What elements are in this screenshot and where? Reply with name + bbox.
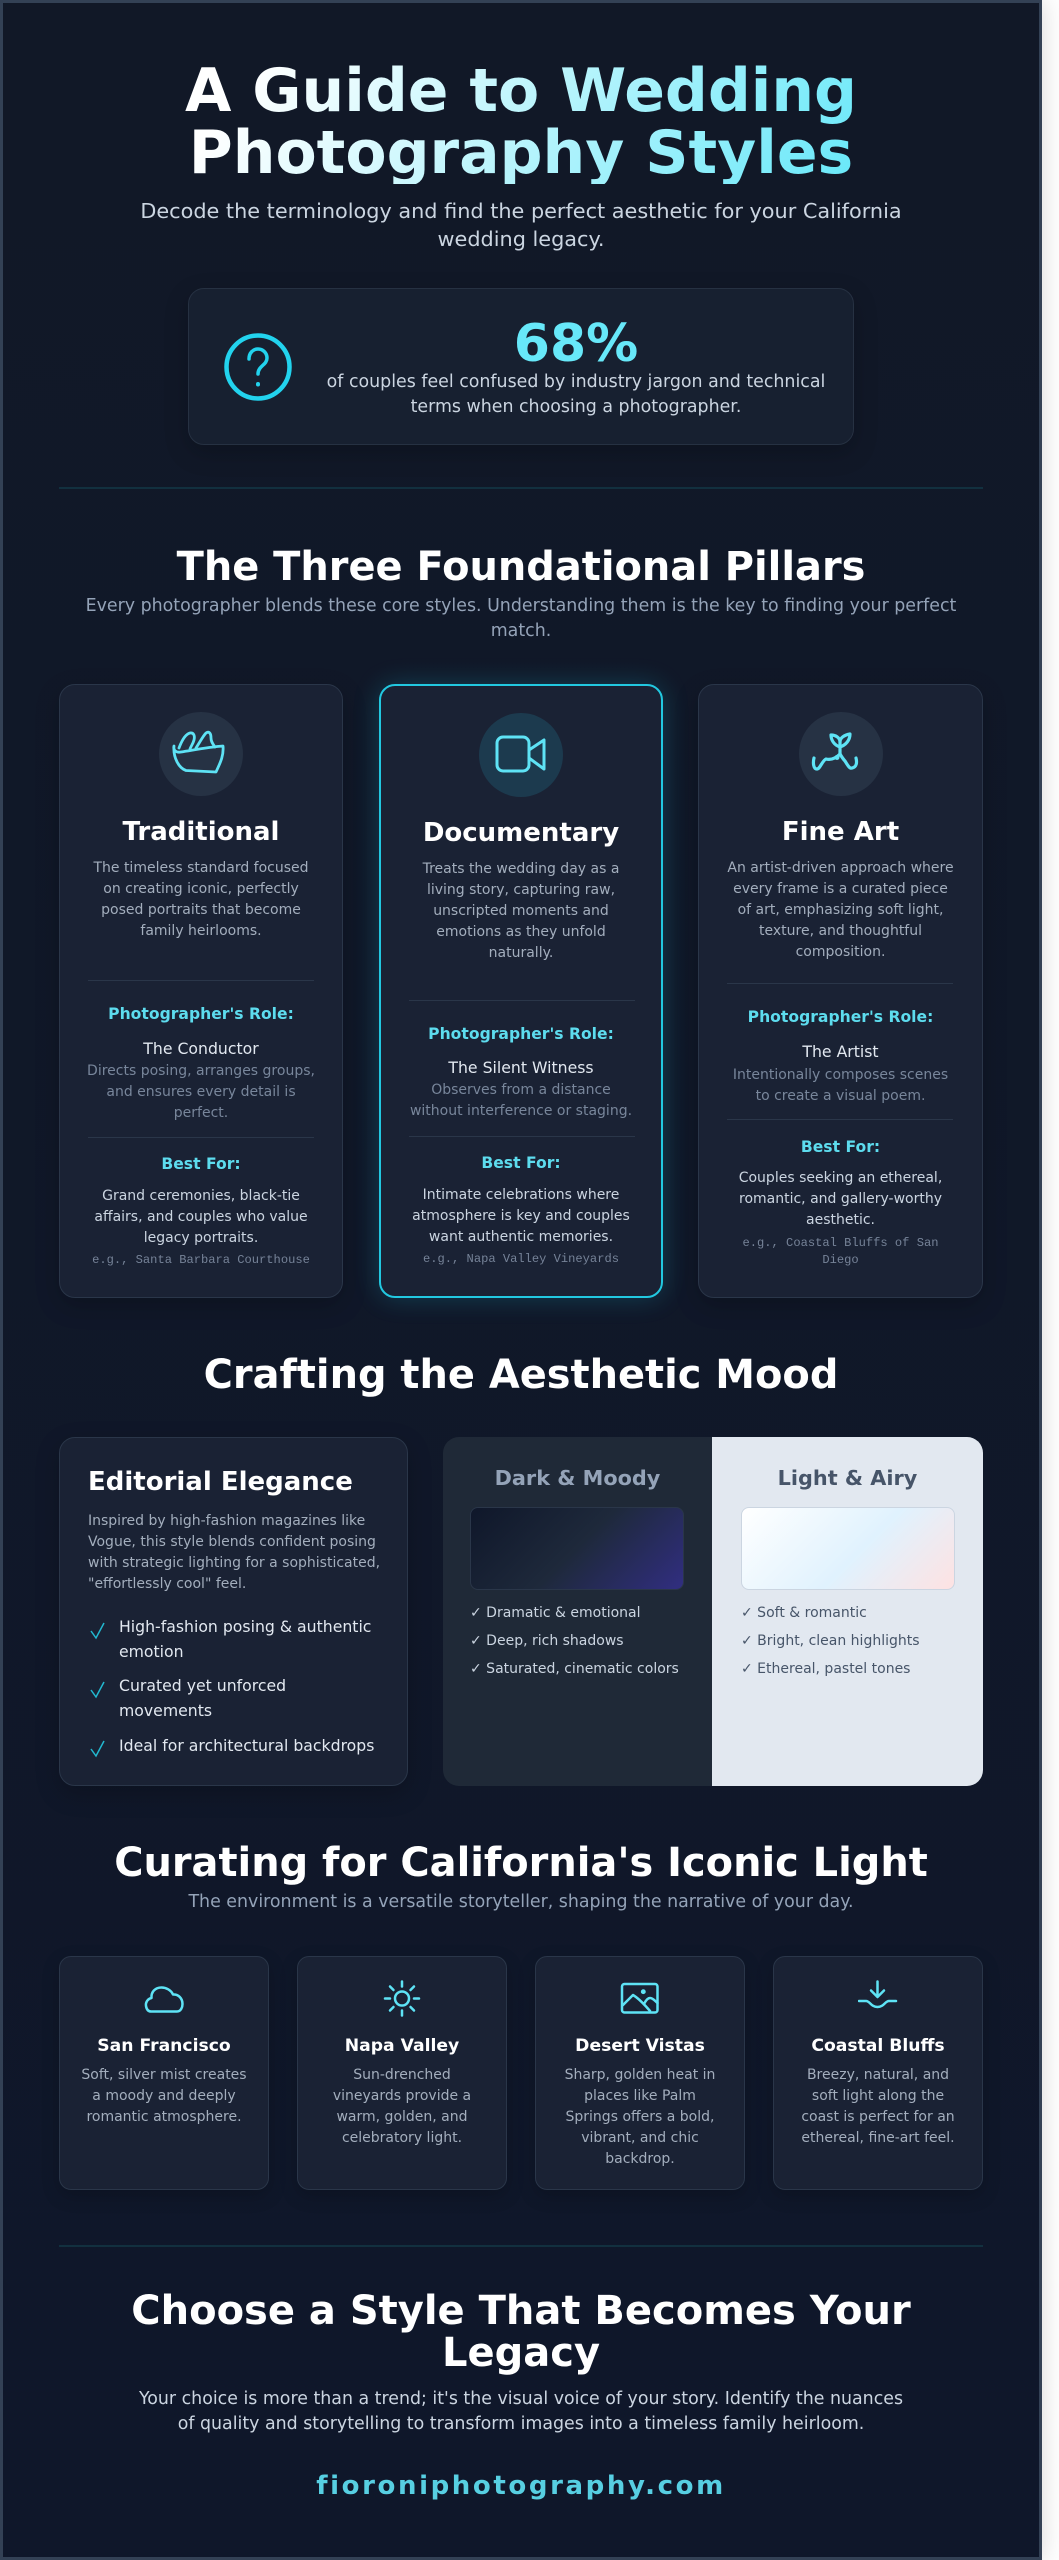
city description: a moody and deeply [92, 2088, 236, 2104]
best for text: want authentic memories. [429, 1228, 613, 1244]
closing text: Your choice is more than a trend; it's the visual voice of your story. Identify the nuances [139, 2389, 903, 2409]
description: naturally. [489, 944, 553, 960]
trait list: ✓ Bright, clean highlights [741, 1633, 920, 1649]
description: living story, capturing raw, [427, 882, 615, 898]
example: Diego [822, 1252, 859, 1266]
heading: closing: Choose a Style That Becomes Your [131, 2288, 911, 2334]
role label: Photographer's Role: [748, 1008, 933, 1026]
statistic description [327, 372, 825, 416]
trait list: ✓ Deep, rich shadows [470, 1633, 624, 1649]
best for text: affairs, and couples who value [94, 1208, 308, 1224]
name: Documentary [423, 818, 619, 848]
city description: celebratory light. [342, 2130, 462, 2146]
title: Photography Styles [189, 118, 853, 188]
feature text: movements [119, 1700, 212, 1720]
role description: Intentionally composes scenes [733, 1066, 948, 1082]
best for text: romantic, and gallery-worthy [739, 1190, 942, 1206]
best for text [739, 1170, 942, 1228]
panel description: with strategic lighting for a sophisticated, [88, 1555, 380, 1571]
feature text: emotion [119, 1642, 184, 1660]
panel: documentary [379, 684, 663, 1298]
trait list [470, 1605, 679, 1677]
city description: Sun-drenched [353, 2067, 451, 2083]
panel: desert vistas [535, 1956, 745, 2190]
statistic number: 68% [514, 314, 638, 374]
name: Fine Art [782, 817, 899, 847]
statistic description: of couples feel confused by industry jargon and technical [327, 372, 825, 392]
city name: San Francisco [97, 2036, 231, 2056]
panel: editorial elegance [59, 1437, 408, 1786]
description [422, 860, 619, 960]
role description: to create a visual poem. [756, 1088, 925, 1104]
best for text [94, 1188, 308, 1246]
role description: Observes from a distance [431, 1082, 611, 1098]
example: e.g., Napa Valley Vineyards [423, 1252, 619, 1266]
city description: soft light along the [812, 2088, 944, 2104]
icon: traditional bowl [159, 712, 243, 796]
description: of art, emphasizing soft light, [738, 902, 943, 918]
description: Treats the wedding day as a [423, 860, 619, 876]
panel: napa valley [297, 1956, 507, 2190]
city description: Springs offers a bold, [566, 2109, 714, 2125]
statistic description: terms when choosing a photographer. [411, 396, 741, 416]
description [93, 860, 309, 939]
feature list [90, 1617, 374, 1758]
city description: coast is perfect for an [801, 2109, 955, 2125]
heading: closing: Legacy [442, 2330, 600, 2376]
city description: warm, golden, and [336, 2109, 468, 2125]
title: A Guide to Wedding [185, 56, 857, 126]
city description [333, 2067, 471, 2146]
icon: sun [384, 1980, 420, 2017]
role description [410, 1082, 632, 1118]
feature text: High-fashion posing & authentic [119, 1617, 371, 1636]
style heading: Dark & Moody [495, 1466, 660, 1490]
description: every frame is a curated piece [733, 881, 948, 897]
city description: backdrop. [605, 2151, 675, 2167]
description: The timeless standard focused [93, 860, 309, 876]
city description: Breezy, natural, and [807, 2067, 949, 2083]
example [743, 1236, 938, 1266]
city description [565, 2067, 715, 2167]
city description [801, 2067, 955, 2146]
panel: traditional [59, 684, 343, 1298]
icon: check [90, 1622, 105, 1640]
trait list: ✓ Dramatic & emotional [470, 1605, 641, 1621]
swatch: light gradient [741, 1507, 955, 1590]
city description: vineyards provide a [333, 2088, 471, 2104]
role label: Photographer's Role: [108, 1005, 294, 1023]
icon: video camera [479, 713, 563, 797]
city description: ethereal, fine-art feel. [801, 2130, 955, 2146]
subtitle: Decode the terminology and find the perfect aesthetic for your California [140, 199, 902, 223]
icon: cloud [144, 1986, 184, 2013]
icon: fine art sprout [799, 712, 883, 796]
role description: perfect. [174, 1104, 228, 1120]
role description [733, 1066, 948, 1104]
city name: Desert Vistas [575, 2036, 705, 2056]
trait list: ✓ Ethereal, pastel tones [741, 1661, 910, 1677]
description: texture, and thoughtful [759, 923, 922, 939]
panel description [88, 1513, 380, 1592]
description: family heirlooms. [140, 923, 262, 939]
panel: coastal bluffs [773, 1956, 983, 2190]
best for label: Best For: [481, 1154, 561, 1172]
heading: california light: Curating for California's Iconic Light [114, 1840, 928, 1886]
best for label: Best For: [161, 1154, 241, 1172]
panel: fine art [698, 684, 983, 1298]
icon: check [90, 1740, 105, 1758]
role description: without interference or staging. [410, 1102, 632, 1118]
best for text: legacy portraits. [144, 1230, 258, 1246]
best for label: Best For: [801, 1138, 880, 1156]
best for text: atmosphere is key and couples [412, 1208, 630, 1224]
description: unscripted moments and [433, 902, 609, 918]
pillars description: match. [491, 621, 551, 641]
title [183, 60, 859, 184]
swatch: dark gradient [470, 1507, 684, 1590]
city name: Coastal Bluffs [811, 2036, 945, 2056]
city description: vibrant, and chic [581, 2130, 699, 2146]
panel heading: Editorial Elegance [88, 1467, 353, 1497]
city description: romantic atmosphere. [86, 2109, 242, 2125]
subtitle [140, 199, 902, 251]
name: Traditional [123, 817, 279, 847]
icon: landscape [620, 1982, 659, 2014]
description: composition. [796, 944, 885, 960]
best for text: Intimate celebrations where [423, 1186, 619, 1202]
trait list: ✓ Saturated, cinematic colors [470, 1661, 679, 1677]
heading: closing [131, 2288, 911, 2376]
best for text: Couples seeking an ethereal, [739, 1170, 942, 1186]
city description: places like Palm [584, 2088, 696, 2104]
trait list: ✓ Soft & romantic [741, 1605, 867, 1621]
description: on creating iconic, perfectly [103, 881, 299, 897]
closing text [139, 2389, 903, 2434]
heading: aesthetic mood: Crafting the Aesthetic Mood [204, 1352, 838, 1398]
subtitle: wedding legacy. [438, 227, 604, 251]
panel description: Vogue, this style blends confident posing [88, 1534, 376, 1550]
description: emotions as they unfold [436, 924, 606, 940]
panel description: "effortlessly cool" feel. [88, 1576, 246, 1592]
role name: The Artist [802, 1042, 879, 1061]
best for text: Grand ceremonies, black-tie [102, 1188, 300, 1204]
trait list [741, 1605, 920, 1677]
best for text: aesthetic. [806, 1212, 875, 1228]
role description [87, 1062, 315, 1120]
california light description: The environment is a versatile storyteller, shaping the narrative of your day. [188, 1892, 854, 1912]
icon: question mark [224, 333, 292, 401]
role description: Directs posing, arranges groups, [87, 1062, 315, 1078]
panel: confusion statistic [188, 288, 854, 445]
feature text: Ideal for architectural backdrops [119, 1736, 374, 1754]
panel: san francisco [59, 1956, 269, 2190]
description [727, 860, 954, 960]
closing text: of quality and storytelling to transform images into a timeless family heirloom. [178, 2414, 864, 2434]
feature text [119, 1676, 286, 1720]
role name: The Conductor [143, 1039, 259, 1058]
panel: light and airy [712, 1437, 983, 1786]
heading: pillars: The Three Foundational Pillars [177, 544, 865, 590]
description: An artist-driven approach where [727, 860, 954, 876]
pillars description [86, 596, 956, 641]
feature text: Curated yet unforced [119, 1676, 286, 1695]
best for text [412, 1186, 630, 1244]
icon: sea arrow [858, 1980, 898, 2008]
panel description: Inspired by high-fashion magazines like [88, 1513, 365, 1529]
description: posed portraits that become [101, 902, 301, 918]
pillars description: Every photographer blends these core styles. Understanding them is the key to finding your perfect [86, 596, 956, 616]
role description: and ensures every detail is [106, 1084, 296, 1100]
style heading: Light & Airy [778, 1466, 917, 1490]
feature text [119, 1617, 371, 1660]
city description: Soft, silver mist creates [81, 2067, 247, 2083]
website link: fioroniphotography.com [316, 2471, 726, 2501]
example: e.g., Santa Barbara Courthouse [92, 1252, 310, 1266]
panel: dark and moody [443, 1437, 712, 1786]
example: e.g., Coastal Bluffs of San [743, 1236, 938, 1250]
city name: Napa Valley [345, 2036, 459, 2056]
icon: check [90, 1682, 105, 1698]
city description: Sharp, golden heat in [565, 2067, 715, 2083]
city description [81, 2067, 247, 2125]
role name: The Silent Witness [448, 1058, 594, 1077]
role label: Photographer's Role: [428, 1025, 614, 1043]
